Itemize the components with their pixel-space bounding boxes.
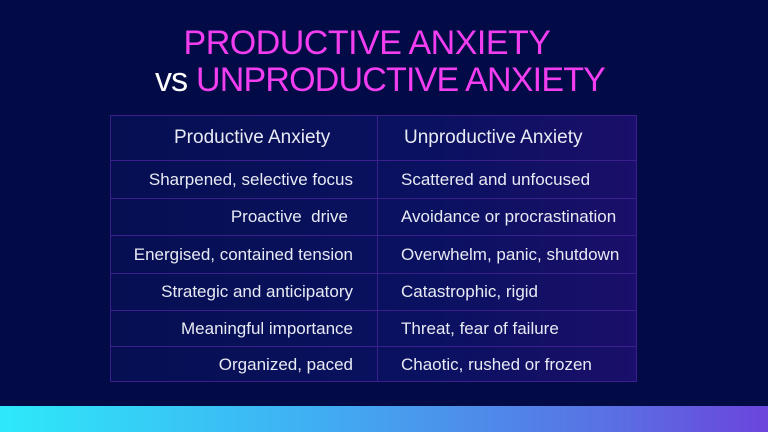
title bbox=[155, 24, 605, 99]
comparison table bbox=[110, 115, 637, 382]
row 6: Chaotic, rushed or frozen bbox=[401, 354, 592, 374]
row 1: Sharpened, selective focus bbox=[149, 170, 353, 188]
row 4: Catastrophic, rigid bbox=[401, 282, 538, 301]
title: vs UNPRODUCTIVE ANXIETY bbox=[155, 61, 605, 99]
header row: Unproductive Anxiety bbox=[404, 127, 582, 148]
row 5: Threat, fear of failure bbox=[401, 318, 559, 338]
row 3 bbox=[111, 235, 636, 273]
row 5 bbox=[111, 310, 636, 346]
row 4: Strategic and anticipatory bbox=[161, 282, 353, 301]
row 3: Energised, contained tension bbox=[134, 244, 353, 264]
row 1 bbox=[111, 160, 636, 198]
header row: Productive Anxiety bbox=[174, 127, 330, 148]
row 3: Overwhelm, panic, shutdown bbox=[401, 244, 619, 264]
row 1: Scattered and unfocused bbox=[401, 170, 590, 188]
row 6: Organized, paced bbox=[219, 354, 353, 374]
title: PRODUCTIVE ANXIETY bbox=[184, 24, 550, 62]
row 2 bbox=[111, 198, 636, 235]
row 4 bbox=[111, 273, 636, 310]
bottom gradient bar bbox=[0, 406, 768, 432]
row 6 bbox=[111, 346, 636, 382]
row 2: Avoidance or procrastination bbox=[401, 207, 616, 226]
row 2: Proactive drive bbox=[231, 207, 348, 226]
header row bbox=[174, 127, 582, 148]
row 5: Meaningful importance bbox=[181, 318, 353, 338]
